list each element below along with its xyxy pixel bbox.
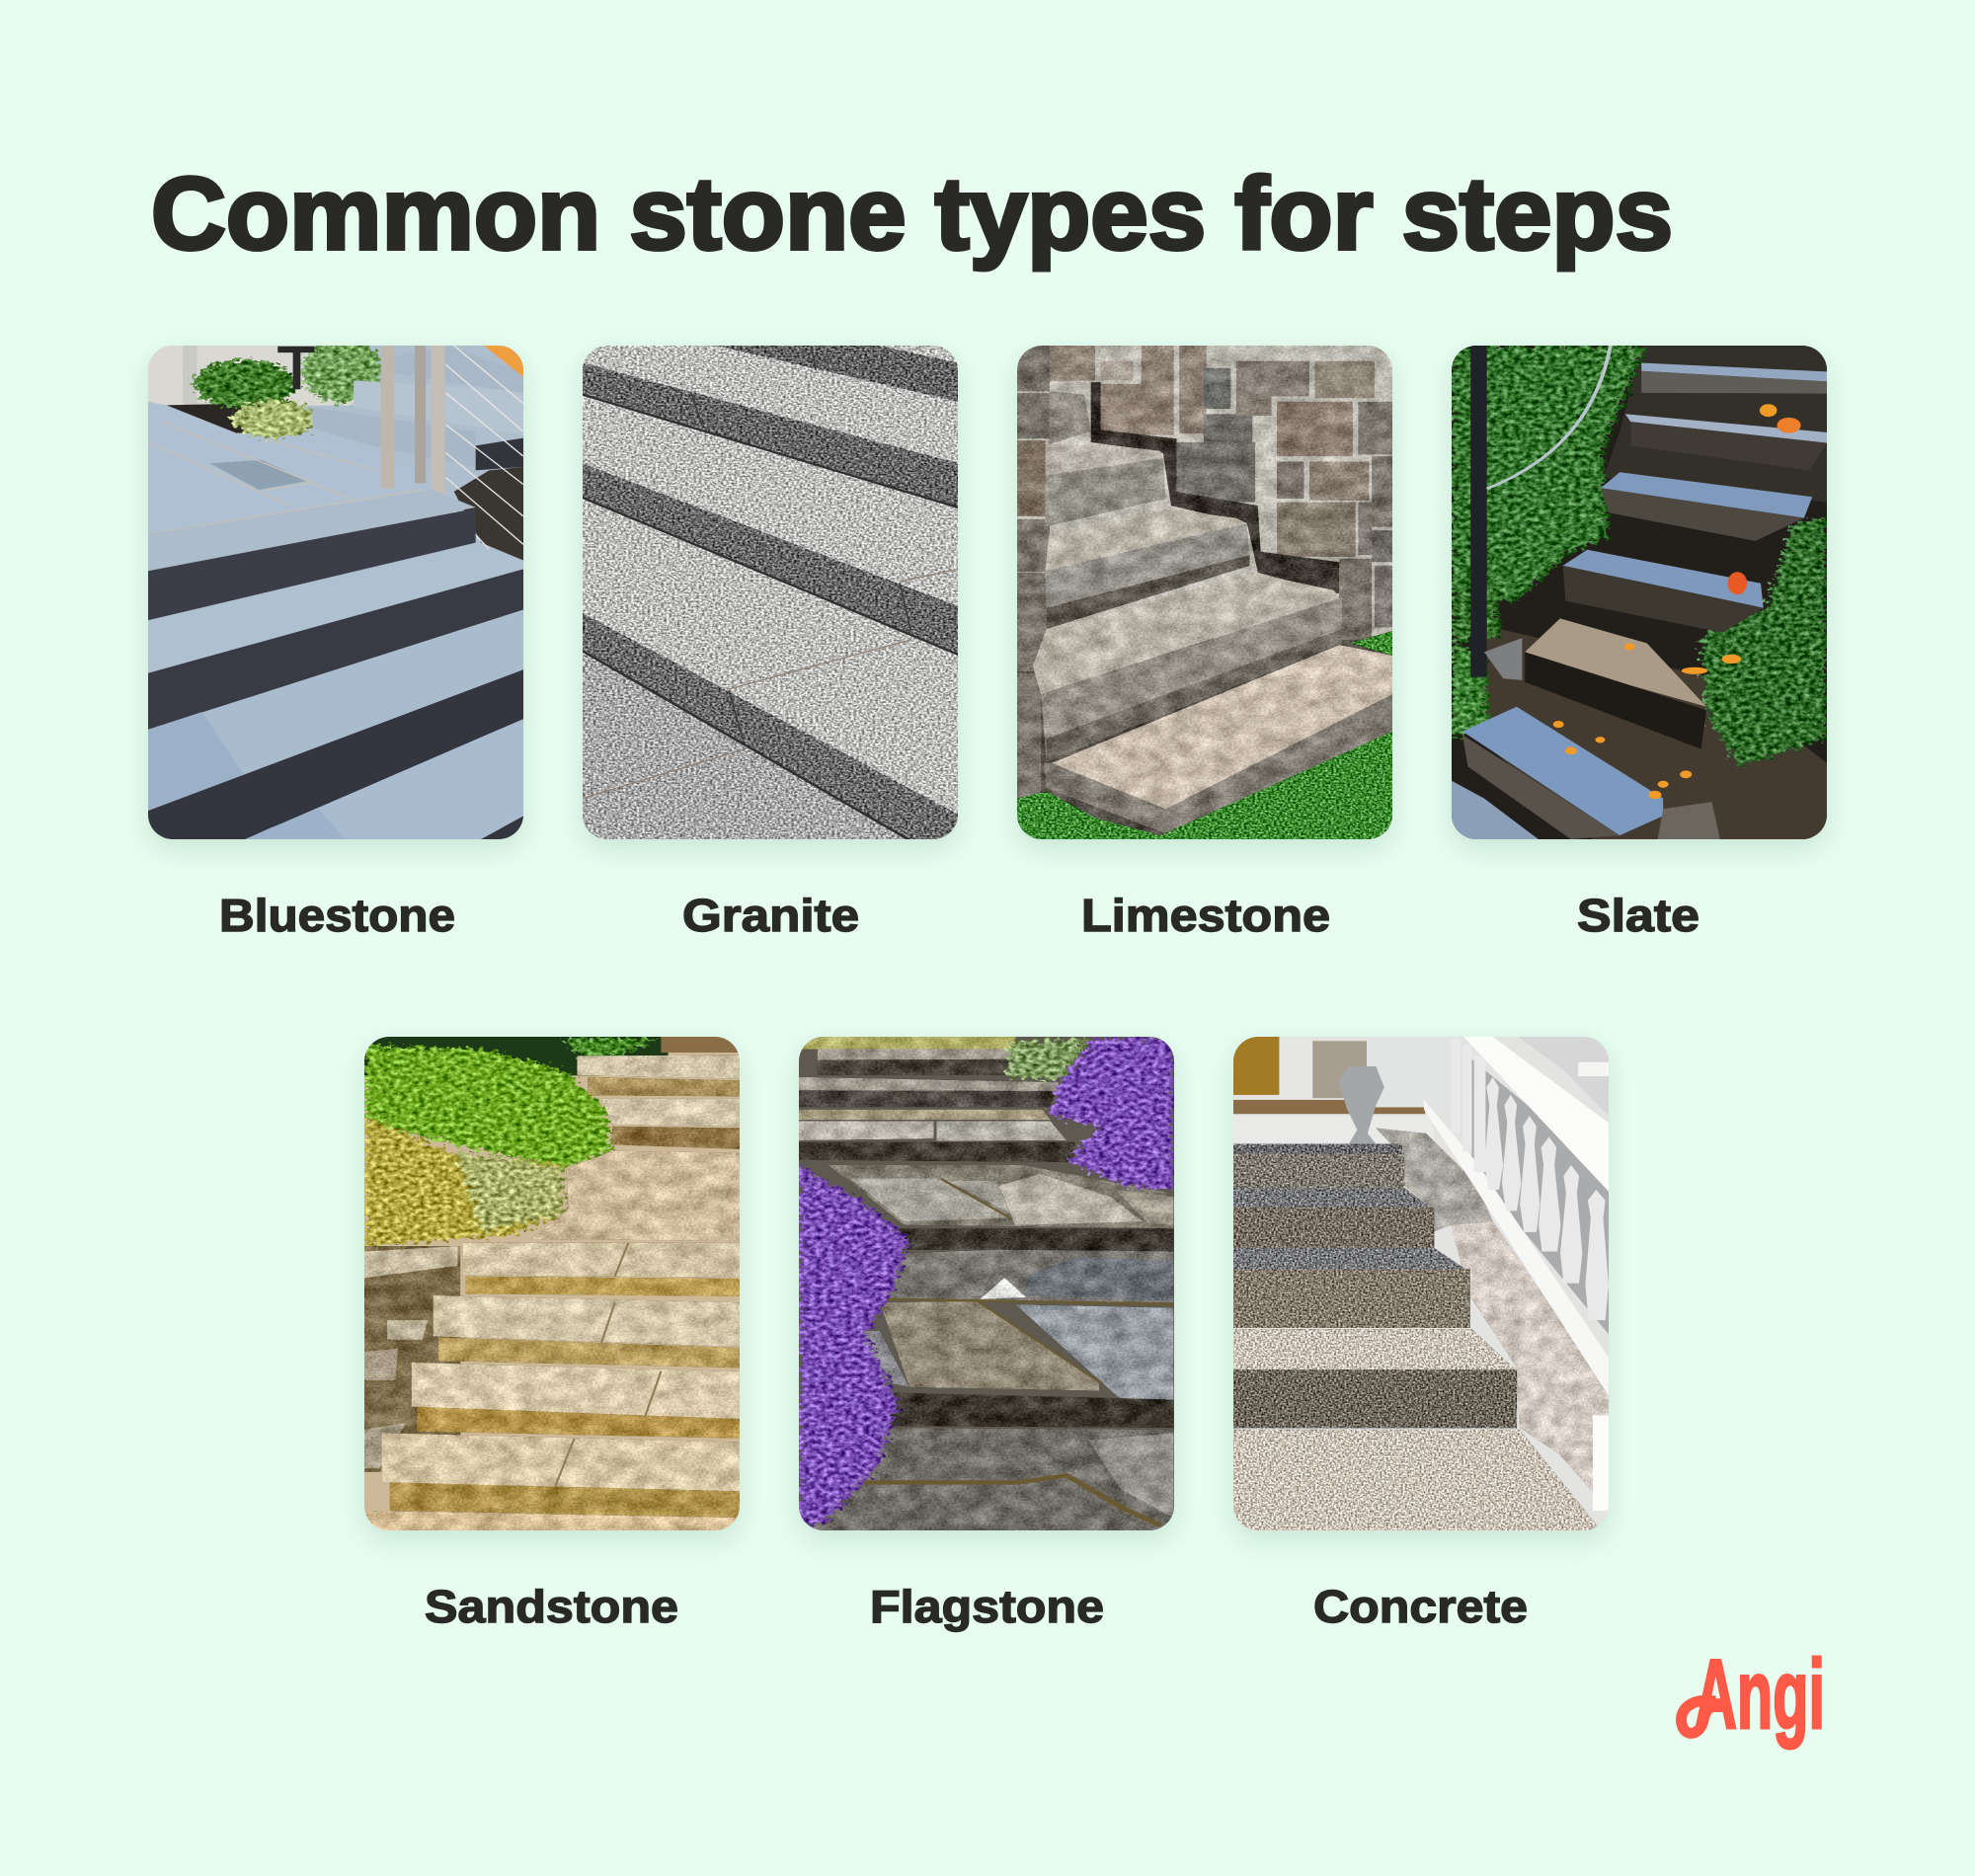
panel: Flagstone xyxy=(799,1037,1174,1632)
panel: Granite xyxy=(583,346,958,941)
label: Concrete: Concrete xyxy=(1313,1581,1528,1632)
label: Sandstone: Sandstone xyxy=(425,1581,678,1632)
title: Common stone types for steps xyxy=(151,157,1673,272)
balusters xyxy=(1451,1038,1609,1320)
logo: Angi: Angi xyxy=(1695,1639,1825,1749)
panel: Concrete xyxy=(1233,1037,1609,1632)
panel: Limestone xyxy=(1017,346,1392,941)
label: Granite: Granite xyxy=(682,890,859,941)
photo: Limestone steps xyxy=(1017,346,1392,839)
label: Limestone: Limestone xyxy=(1081,890,1330,941)
panel: Bluestone xyxy=(148,337,523,941)
label: Slate: Slate xyxy=(1577,890,1699,941)
photo: Flagstone steps xyxy=(799,1037,1174,1530)
label: Bluestone: Bluestone xyxy=(219,890,455,941)
panel: Sandstone xyxy=(364,1037,740,1632)
photo: Granite steps xyxy=(583,346,958,839)
photo: Bluestone steps xyxy=(148,346,523,839)
label: Flagstone: Flagstone xyxy=(870,1581,1104,1632)
photo: Slate steps xyxy=(1452,346,1827,839)
photo: Sandstone steps xyxy=(364,1037,740,1530)
logo: Angi xyxy=(1682,1639,1825,1749)
panel: Slate xyxy=(1452,346,1827,941)
photo: Concrete steps xyxy=(1233,1037,1609,1530)
